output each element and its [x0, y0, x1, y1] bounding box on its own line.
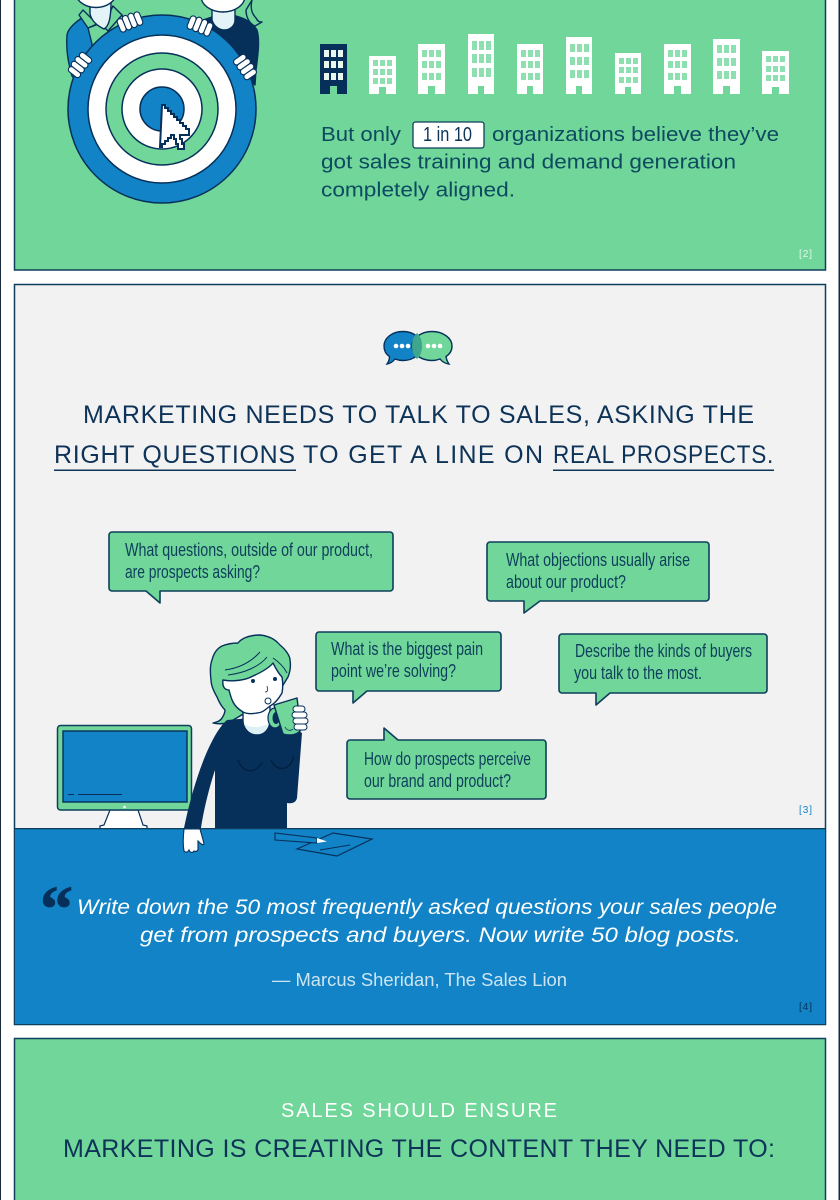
heading: MARKETING IS CREATING THE CONTENT THEY NEED TO:: [63, 1135, 775, 1163]
callout: brand perception: How do prospects perceive: [364, 748, 531, 769]
windows: [324, 41, 785, 84]
text block: 1 in 10 organizations: completely aligned.: [321, 180, 515, 202]
callout: objections: about our product?: [506, 571, 626, 592]
callout: brand perception: our brand and product?: [364, 770, 511, 791]
panel: target and buildings: [14, 0, 826, 270]
neck: [243, 706, 270, 735]
person left: [67, 0, 125, 84]
icon: desktop monitor: [58, 726, 192, 829]
hands: [66, 10, 258, 81]
building highlighted: [320, 44, 347, 94]
hand on mug: [292, 706, 308, 730]
cursor: [160, 105, 189, 149]
blue desk and quote band: [15, 828, 825, 1024]
footnote 4: [4]: [799, 1002, 812, 1013]
body: [184, 717, 302, 828]
callout: pain point: point we’re solving?: [331, 660, 456, 681]
mug: [268, 698, 301, 735]
quote block: [40, 873, 777, 990]
callout: brand perception: [347, 728, 546, 799]
icon: quotation mark: “: [40, 873, 73, 946]
callout: pain point: What is the biggest pain: [331, 638, 483, 659]
text block: 1 in 10 organizations: [321, 122, 779, 202]
icon: paper and pencil on desk: [275, 833, 372, 856]
callout: questions outside product: [109, 532, 393, 603]
illustration: two people holding a target: [66, 0, 262, 203]
quote block: — Marcus Sheridan, The Sales Lion: [272, 970, 567, 990]
facial features: [251, 677, 277, 704]
quote block: get from prospects and buyers. Now write 50 blog posts.: [140, 924, 741, 947]
heading: REAL PROSPECTS.: [553, 441, 774, 469]
person right: [201, 0, 262, 85]
callout: kinds of buyers: you talk to the most.: [574, 662, 702, 683]
hand on desk: [183, 829, 204, 852]
panel: sales should ensure: [14, 1038, 826, 1200]
footnote 3: [3]: [799, 805, 812, 816]
panel: talk to sales: [14, 284, 826, 1024]
heading: [54, 401, 774, 471]
callout: kinds of buyers: [559, 634, 767, 705]
footnote 2: [2]: [799, 249, 812, 260]
face: [223, 663, 283, 714]
chest lines: [238, 756, 294, 771]
fringe lines: [225, 652, 287, 675]
callout: kinds of buyers: Describe the kinds of buyers: [575, 640, 752, 661]
text block: 1 in 10 organizations: got sales training and demand generation: [321, 152, 736, 174]
icon: chat bubbles: [384, 332, 452, 364]
text block: 1 in 10 organizations: organizations believe they’ve: [492, 124, 779, 146]
callout: questions outside product: What questions, outside of our product,: [125, 539, 373, 560]
target: [68, 15, 256, 203]
building row: one in ten highlighted: [320, 34, 789, 94]
callout: pain point: [316, 632, 501, 703]
callout: questions outside product: are prospects asking?: [125, 561, 260, 582]
callout: objections: What objections usually arise: [506, 549, 690, 570]
callout: objections: [487, 542, 709, 613]
quote block: Write down the 50 most frequently asked questions your sales people: [77, 896, 777, 919]
text block: 1 in 10 organizations: But only: [321, 124, 401, 146]
heading: RIGHT QUESTIONS: [54, 441, 295, 469]
heading: MARKETING NEEDS TO TALK TO SALES, ASKING THE: [83, 401, 754, 429]
heading: TO GET A LINE ON: [303, 441, 543, 469]
hair: [210, 635, 290, 724]
highlight box: 1 in 10: [423, 124, 472, 146]
illustration: woman drinking coffee: [183, 635, 308, 852]
subheading: SALES SHOULD ENSURE: [281, 1100, 557, 1122]
